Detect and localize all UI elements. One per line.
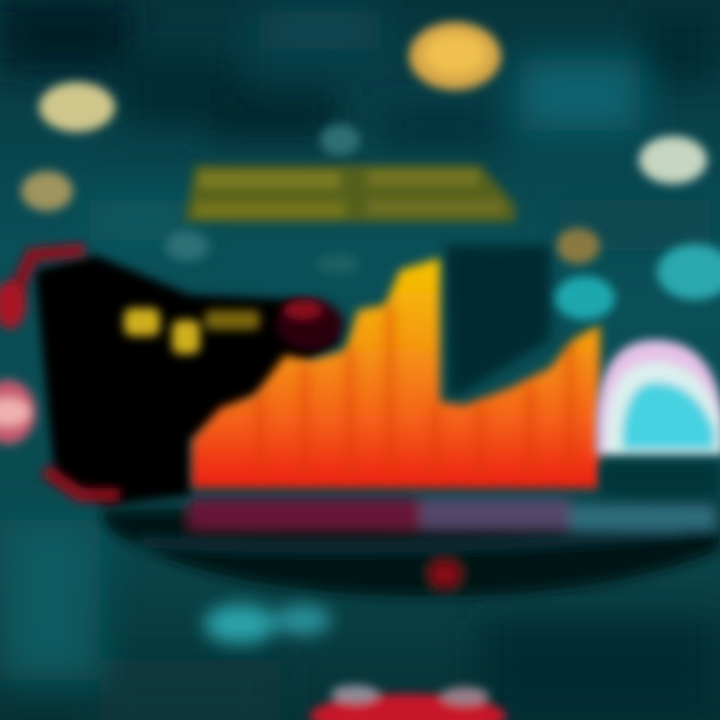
red rim of panel — [10, 250, 120, 495]
chart heading in yellow — [124, 308, 260, 354]
decorative circle: top yellow — [409, 22, 501, 90]
small blurred labels above chart — [165, 228, 720, 300]
decorative circle: tan left — [21, 171, 73, 211]
dark band under rainbow — [600, 462, 720, 496]
decorative circle: cream right — [639, 136, 707, 184]
teal callout above right chart — [555, 276, 615, 320]
bottom red arc shape — [310, 685, 506, 720]
title block — [185, 165, 515, 222]
blue blob lower center — [204, 604, 331, 644]
decorative circle: cream upper left — [39, 82, 115, 132]
dark panel behind right chart segment — [445, 245, 550, 400]
left pink tab — [0, 281, 36, 444]
base plate — [100, 498, 720, 596]
decorative circle: faint top center — [320, 124, 360, 156]
red marker on chart — [276, 299, 344, 351]
rainbow arc — [596, 340, 720, 455]
area bar chart — [192, 258, 600, 488]
ship shaped dark panel — [10, 250, 340, 505]
bar separators — [260, 305, 570, 480]
